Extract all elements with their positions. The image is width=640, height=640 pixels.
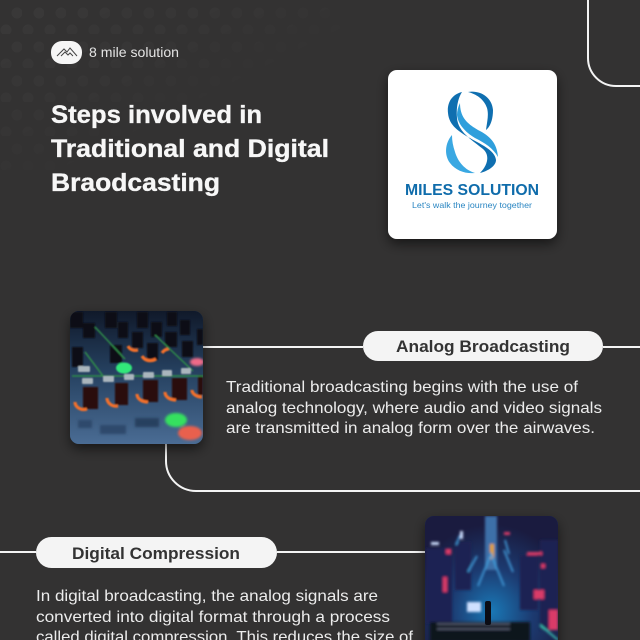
- logo tagline: Let's walk the journey together: [412, 200, 532, 210]
- description text: [226, 379, 602, 437]
- silhouette figure: [485, 601, 491, 625]
- section: analog broadcasting: [70, 311, 603, 444]
- pill heading: [363, 331, 603, 361]
- title: Steps involved in: [51, 101, 262, 129]
- description text: In digital broadcasting, the analog signals are: [36, 588, 378, 605]
- logo wordmark: MILES SOLUTION: [405, 182, 539, 199]
- description text: are transmitted in analog form over the airwaves.: [226, 420, 595, 437]
- brand badge: [51, 41, 179, 64]
- logo card: [388, 70, 557, 239]
- icon: mountain logo: [51, 41, 82, 64]
- brand name: 8 mile solution: [89, 45, 179, 60]
- title: [51, 101, 329, 197]
- description text: Traditional broadcasting begins with the use of: [226, 379, 579, 396]
- image: mixing console: [70, 311, 205, 444]
- title: Braodcasting: [51, 169, 220, 197]
- image: neon city: [425, 516, 558, 640]
- pill heading: Analog Broadcasting: [396, 337, 570, 356]
- pill heading: Digital Compression: [72, 544, 240, 563]
- description text: [36, 588, 414, 640]
- description text: converted into digital format through a process: [36, 609, 390, 626]
- icon: blue figure eight: [446, 92, 498, 173]
- pill heading: [36, 537, 277, 568]
- title: Traditional and Digital: [51, 135, 329, 163]
- description text: analog technology, where audio and video signals: [226, 400, 602, 417]
- section: digital compression: [36, 516, 558, 640]
